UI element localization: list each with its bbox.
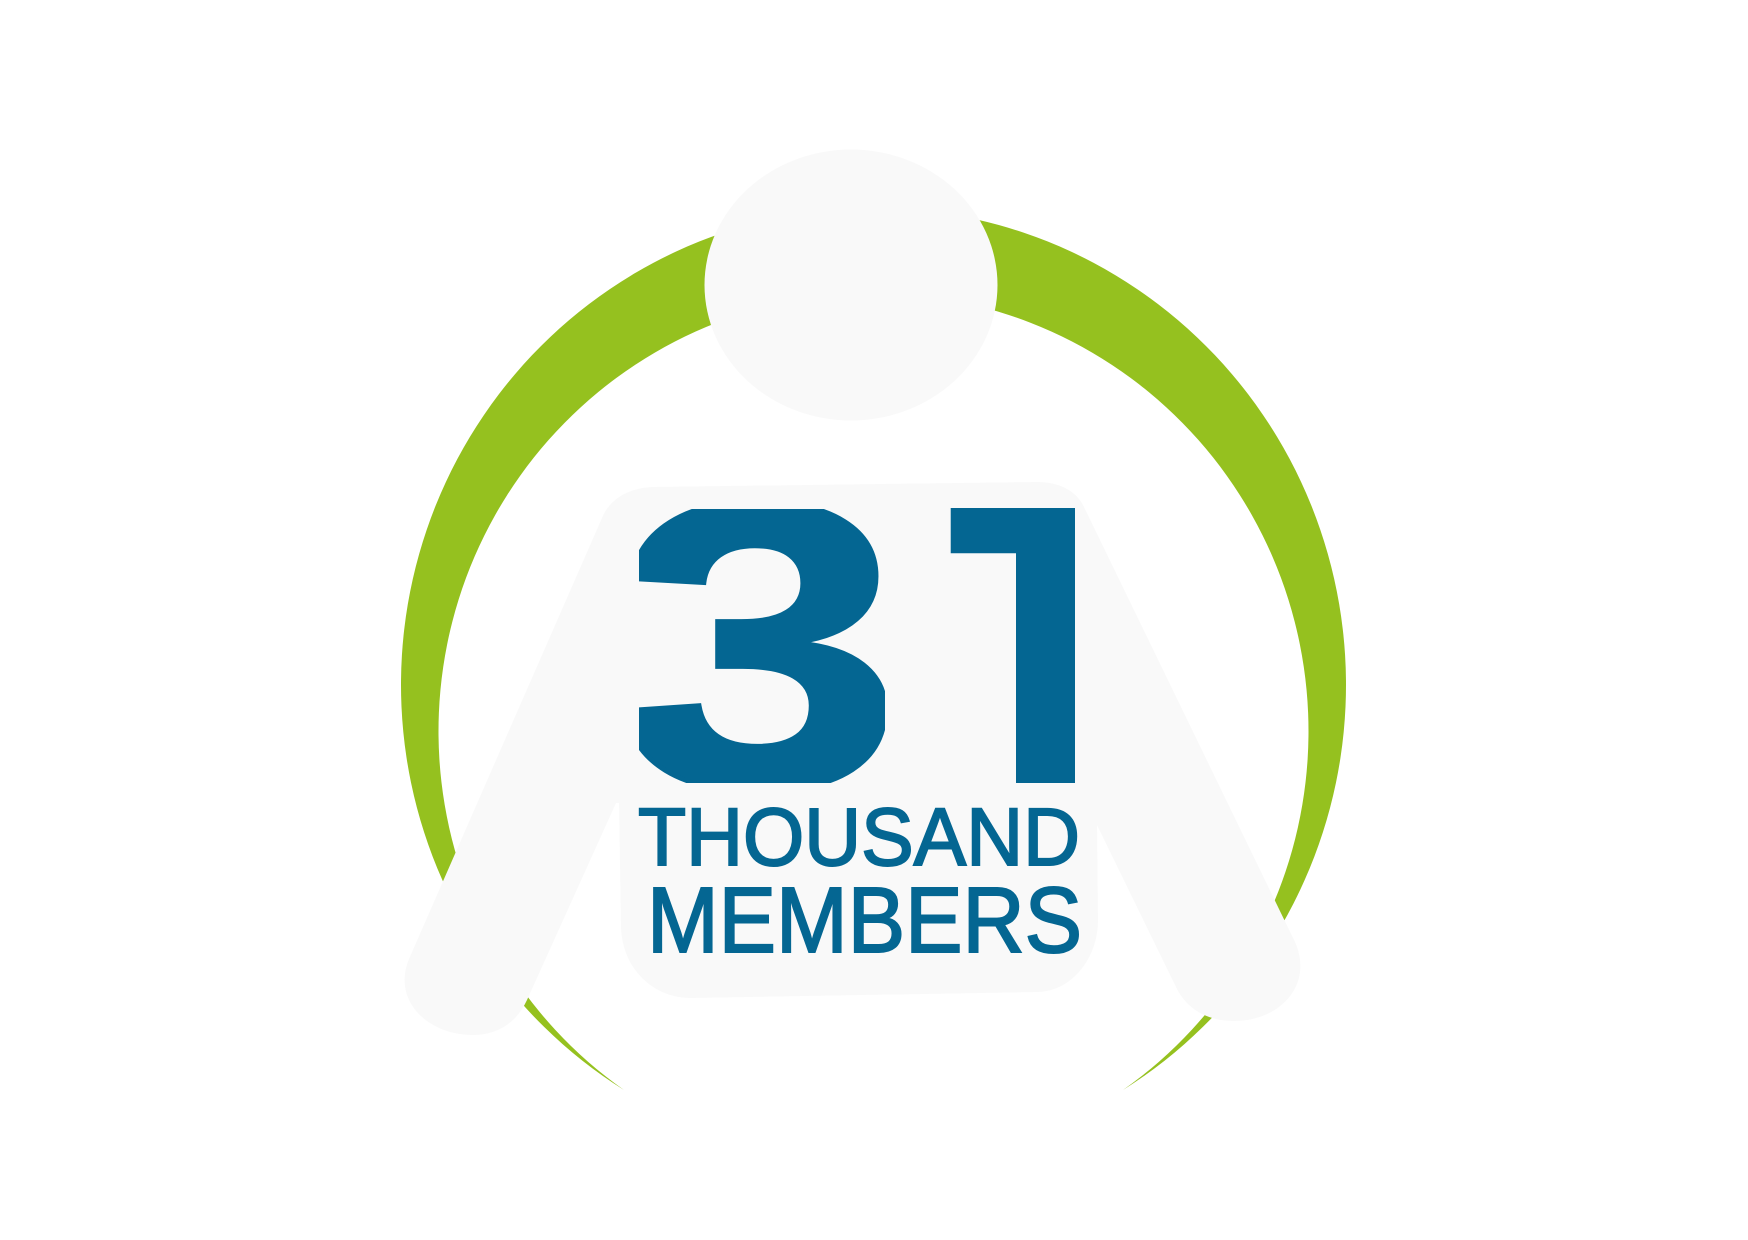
person icon: head [704, 150, 998, 420]
label: members: MEMBERS [647, 868, 1082, 972]
big number 31 [639, 508, 1075, 783]
digit 3: 3 [614, 417, 904, 874]
digit 1: 1 [899, 244, 1184, 999]
infographic: person with members count [401, 220, 1346, 1090]
person icon: body and arms [405, 482, 1300, 1035]
label: thousand: THOUSAND [638, 792, 1080, 883]
green crescent ring [401, 208, 1346, 1090]
